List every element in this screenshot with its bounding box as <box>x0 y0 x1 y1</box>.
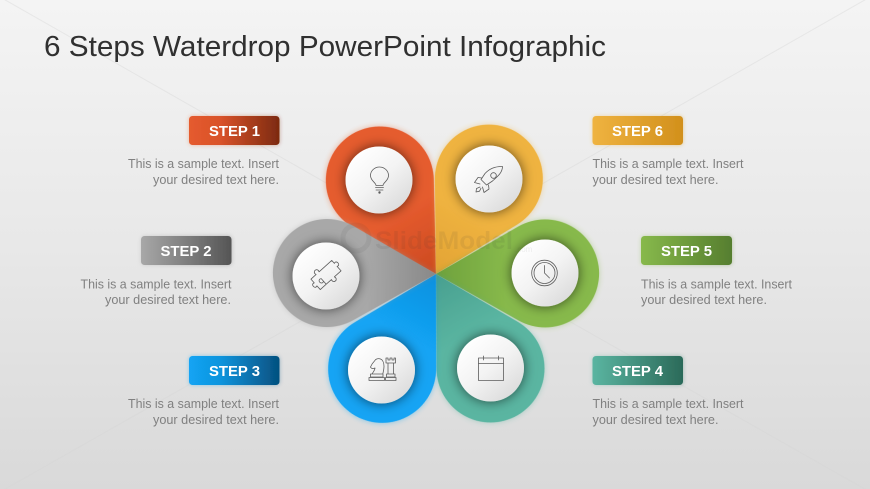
step 3 text: This is a sample text. Insert <box>128 397 280 411</box>
step 6 label: STEP 6 <box>612 124 663 140</box>
step 2 label <box>141 236 232 265</box>
step 3 label: STEP 3 <box>209 364 260 380</box>
step 6 text: This is a sample text. Insert <box>592 157 744 171</box>
step 1 label <box>189 116 280 145</box>
title: 6 Steps Waterdrop PowerPoint Infographic <box>44 31 606 63</box>
step 6 text: your desired text here. <box>592 173 718 187</box>
petal: step 1 red <box>306 106 482 302</box>
petal: step 5 green <box>436 219 599 328</box>
step 4 text: your desired text here. <box>592 413 718 427</box>
step 1 text <box>128 157 280 187</box>
step 2 label: STEP 2 <box>160 244 212 260</box>
step 2 text <box>80 278 232 307</box>
waterdrop diagram <box>272 105 599 442</box>
step 3 text: your desired text here. <box>153 413 279 427</box>
petal: step 4 teal <box>389 247 564 442</box>
watermark <box>343 225 533 255</box>
petal: step 3 blue <box>309 247 483 442</box>
step 5 text <box>641 278 793 307</box>
watermark: SlideModel <box>375 227 513 255</box>
petal: step 2 gray <box>272 219 436 328</box>
step 3 label <box>189 356 280 385</box>
step 4 label <box>592 356 683 385</box>
step 3 text <box>128 397 280 427</box>
petal: step 6 yellow <box>389 105 562 300</box>
step 4 label: STEP 4 <box>612 364 663 380</box>
step 5 text: This is a sample text. Insert <box>641 278 793 292</box>
step 4 text <box>592 397 744 427</box>
watermark: .com <box>515 245 533 254</box>
step 6 label <box>592 116 683 145</box>
step 6 text <box>592 157 744 187</box>
step 4 text: This is a sample text. Insert <box>592 397 744 411</box>
step 5 label: STEP 5 <box>661 244 712 260</box>
step 1 text: This is a sample text. Insert <box>128 157 280 171</box>
step 5 text: your desired text here. <box>641 293 767 307</box>
step 2 text: This is a sample text. Insert <box>80 278 232 292</box>
step 1 text: your desired text here. <box>153 173 279 187</box>
step 2 text: your desired text here. <box>105 293 231 307</box>
step 1 label: STEP 1 <box>209 124 260 140</box>
step 5 label <box>641 236 732 265</box>
